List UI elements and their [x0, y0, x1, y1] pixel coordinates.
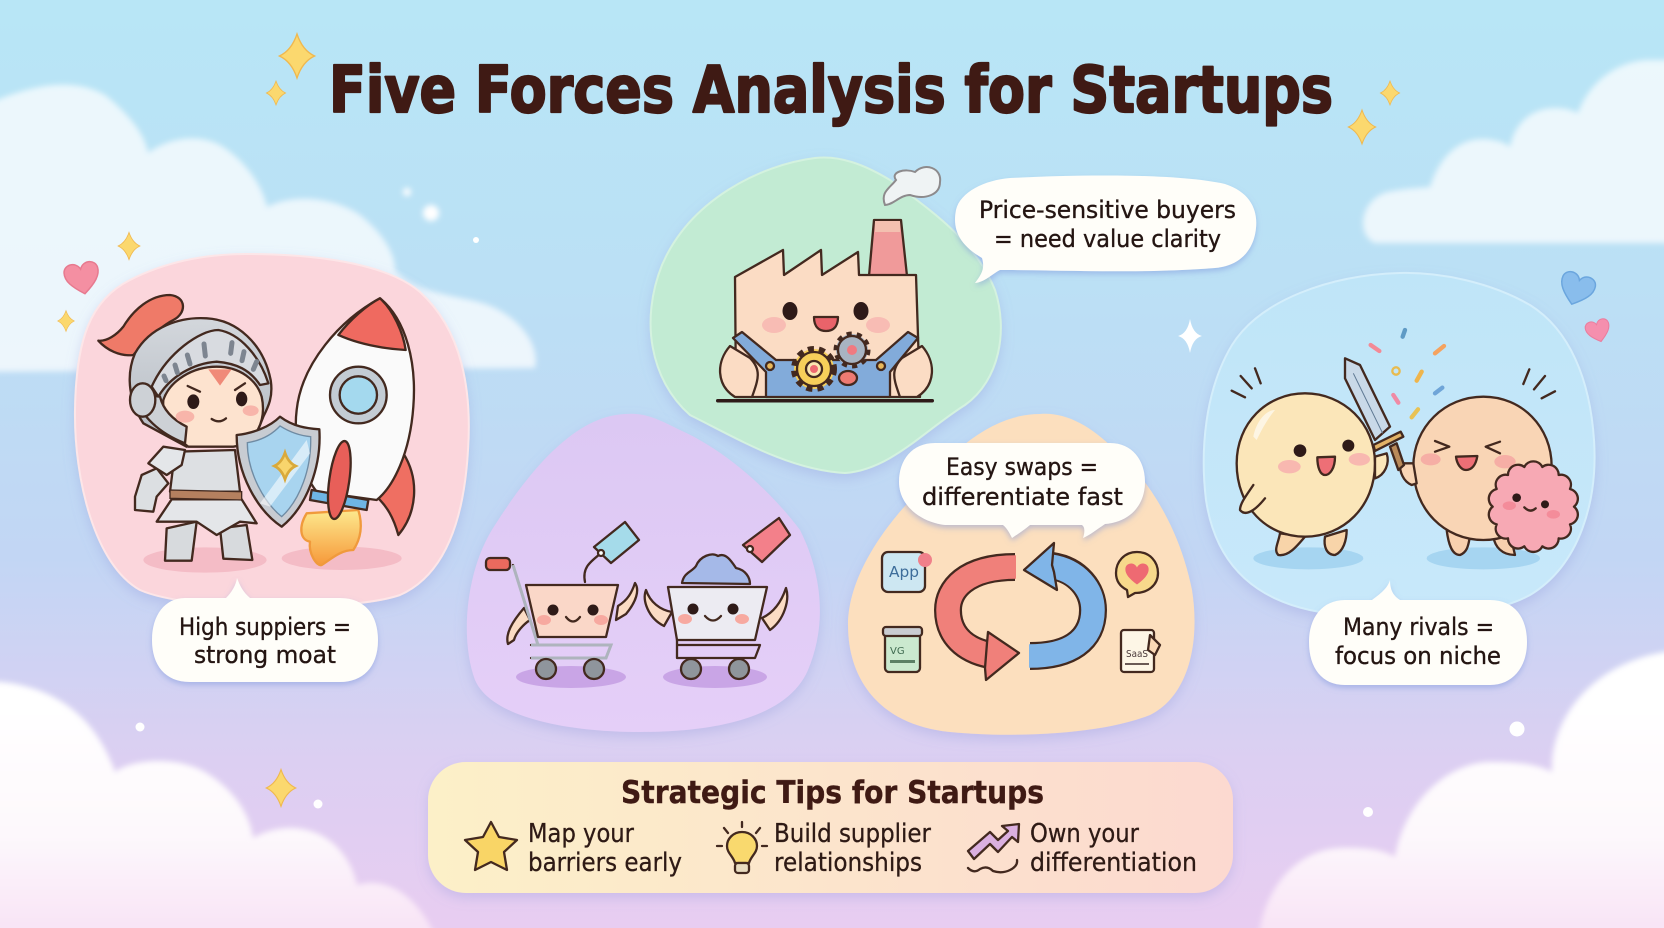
illustration: swap arrows and app icons: SaaS	[1126, 649, 1148, 660]
panel: buyers (green)	[651, 157, 1256, 473]
callout: many rivals: Many rivals =	[1343, 613, 1494, 641]
tip 1: map barriers: barriers early	[528, 848, 682, 878]
callout: substitutes: differentiate fast	[922, 483, 1123, 511]
callout: buyers: Price-sensitive buyers	[979, 196, 1236, 224]
callout: buyers: = need value clarity	[994, 225, 1221, 253]
tips heading: Strategic Tips for Startups	[621, 775, 1044, 811]
illustration: two shopping carts	[486, 518, 790, 688]
illustration: factory character	[716, 167, 940, 402]
callout: high suppliers: High suppiers =	[179, 613, 351, 641]
panel: substitutes (orange)	[848, 414, 1195, 735]
callout: high suppliers: strong moat	[194, 641, 336, 669]
tip 2: supplier relationships: Build supplier	[774, 819, 931, 849]
illustration: swap arrows and app icons: VG	[890, 646, 905, 657]
tip 3: differentiation: Own your	[1030, 819, 1139, 849]
panel: high suppliers (pink)	[75, 254, 469, 682]
callout: many rivals	[1309, 580, 1527, 685]
tip 3: differentiation: differentiation	[1030, 848, 1197, 878]
title: Five Forces Analysis for Startups	[329, 54, 1333, 128]
panel: rivalry carts (purple)	[467, 414, 820, 732]
tip 3: differentiation	[968, 819, 1197, 878]
callout: high suppliers	[152, 578, 378, 682]
panel: strategic tips	[428, 762, 1233, 893]
illustration: two rival blobs and sword	[1232, 330, 1578, 569]
tip 1: map barriers: Map your	[528, 819, 634, 849]
panel: many rivals (blue)	[1204, 273, 1595, 685]
illustration: swap arrows and app icons: App	[889, 563, 919, 581]
callout: buyers	[955, 176, 1256, 283]
tip 1: map barriers	[465, 819, 682, 878]
tip 2: supplier relationships: relationships	[774, 848, 922, 878]
illustration: swap arrows and app icons	[882, 543, 1160, 680]
callout: substitutes: Easy swaps =	[946, 453, 1098, 481]
callout: many rivals: focus on niche	[1335, 642, 1501, 670]
decorative sparkles and hearts	[58, 34, 1613, 817]
tip 2: supplier relationships	[717, 819, 931, 878]
illustration: knight and rocket	[98, 295, 414, 573]
callout: substitutes	[899, 443, 1145, 538]
